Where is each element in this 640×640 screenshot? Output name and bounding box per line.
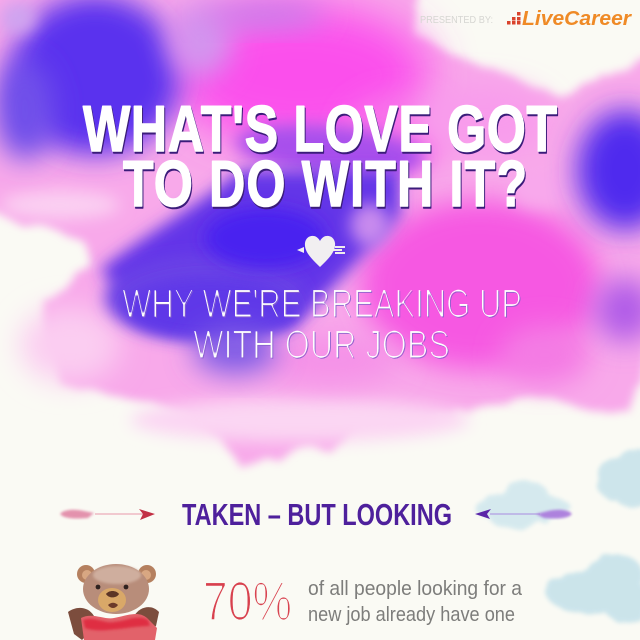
title text [83,94,557,221]
subtitle [122,282,522,367]
subtitle: WHY WE'RE BREAKING UP [122,282,522,326]
logo dots [507,12,520,24]
heart [81,614,157,640]
presented by label: PRESENTED BY: [420,15,493,26]
arrow: right purple [475,509,572,519]
arrow: left pink [60,509,155,520]
decorative cloud: lower right [546,554,640,622]
statistic description: new job already have one [308,603,515,626]
title shadow [84,96,558,223]
bear arms [68,608,94,640]
statistic: 70%: 70% [203,570,292,632]
title [83,94,558,223]
bear muzzle [98,588,126,612]
illustration: teddy bear holding heart [68,564,159,640]
LiveCareer logo [507,8,632,30]
statistic description: of all people looking for a [308,577,523,600]
decorative cloud: beside heading [475,481,571,529]
decorative cloud: top right [596,448,640,509]
title shadow: WHAT'S LOVE GOT [84,96,558,168]
section heading: TAKEN – BUT LOOKING [182,497,452,532]
bear ears [77,565,95,583]
statistic description [308,577,523,626]
watercolor wash background [0,0,640,467]
logo wordmark: LiveCareer [522,8,632,30]
title shadow: TO DO WITH IT? [124,151,528,223]
subtitle: WITH OUR JOBS [193,323,450,367]
bear head [83,564,149,614]
bear eyes [96,585,100,589]
icon: heart with arrow [297,236,345,267]
title text: WHAT'S LOVE GOT [83,94,557,166]
title text: TO DO WITH IT? [123,149,527,221]
